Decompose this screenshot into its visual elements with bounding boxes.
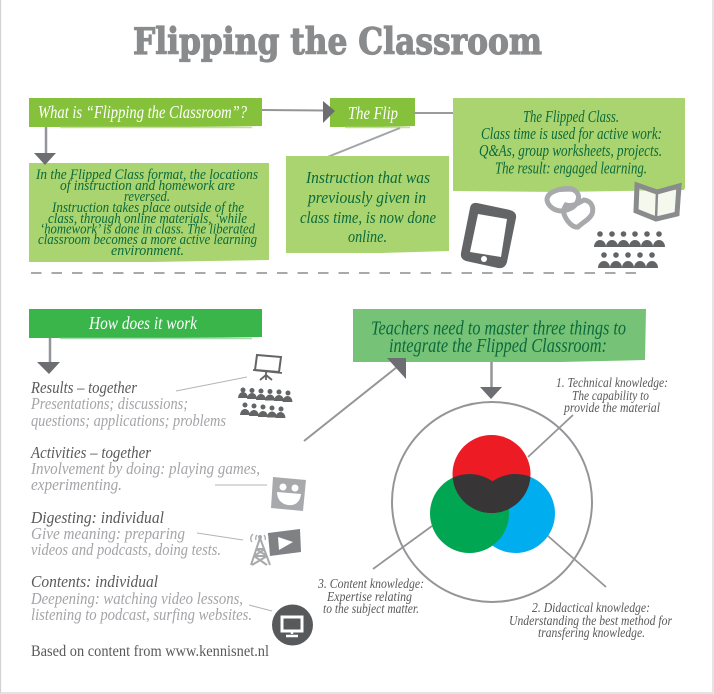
- label: technical knowledge: The capability to: [572, 388, 649, 403]
- icon: broadcast tower and video: [251, 529, 301, 565]
- panel: the flipped class: The result: engaged learning.: [495, 158, 647, 178]
- label: content knowledge: [317, 576, 424, 616]
- panel: the flipped class: [453, 98, 685, 192]
- arrow: diagonal to teachers panel: [304, 358, 406, 441]
- panel: definition text: environment.: [111, 243, 184, 259]
- text: activities: experimenting.: [31, 475, 122, 494]
- icon: audience: [594, 231, 665, 268]
- title: Flipping the Classroom: [133, 21, 542, 63]
- icon: monitor: [272, 604, 313, 646]
- text: results: [30, 378, 226, 430]
- icon: speech bubbles: [547, 188, 593, 227]
- divider: [31, 272, 643, 274]
- panel: the flip: The Flip: [348, 103, 398, 123]
- label: technical knowledge: [556, 375, 668, 415]
- panel: the flipped class: The Flipped Class.: [523, 107, 619, 126]
- connectors: venn to labels: [373, 415, 606, 587]
- panel: what is flipping the classroom: [29, 98, 262, 128]
- connector: the flip to flipped class: [413, 112, 455, 114]
- panel: definition text: ‘homework’ is done in class. The liberated: [40, 222, 256, 238]
- text: digesting: Digesting: individual: [30, 508, 164, 527]
- panel: the flip: [330, 98, 415, 128]
- panel: definition text: classroom becomes a more active learning: [38, 232, 257, 248]
- text: contents: Deepening: watching video lessons,: [30, 589, 243, 608]
- panel: definition text: reversed.: [124, 189, 170, 205]
- connector: the flip to instruction box: [325, 128, 400, 158]
- arrow: what is down to definition: [45, 127, 47, 156]
- label: didactical knowledge: [509, 600, 673, 640]
- arrowhead: definition: [34, 153, 56, 165]
- panel: the flipped class: Q&As, group worksheets, projects.: [479, 141, 662, 160]
- panel: definition text: of instruction and homework are: [60, 178, 236, 194]
- text: activities: Involvement by doing: playing games,: [30, 459, 260, 478]
- text: digesting: Give meaning: preparing: [31, 524, 185, 543]
- text: results: questions; applications; problems: [31, 411, 226, 430]
- panel: teachers need to master: Teachers need to master three things to: [371, 318, 626, 340]
- venn diagram: [392, 402, 592, 602]
- panel: instruction online: Instruction that was: [305, 168, 430, 187]
- text: contents: listening to podcast, surfing websites.: [31, 605, 252, 624]
- panel: the flipped class: Class time is used for active work:: [481, 124, 662, 143]
- label: content knowledge: to the subject matter.: [323, 601, 419, 616]
- text: results: Results – together: [30, 378, 138, 397]
- panel: instruction online: [286, 156, 449, 253]
- icon: open book: [636, 185, 679, 219]
- panel: instruction online: class time, is now done: [300, 208, 436, 227]
- arrow: teachers panel to diagram: [480, 362, 502, 399]
- source note: Based on content from www.kennisnet.nl: [31, 643, 269, 660]
- text: contents: [30, 572, 252, 624]
- text: activities: Activities – together: [30, 443, 152, 462]
- arrow: what is to the flip: [262, 101, 335, 123]
- text: contents: Contents: individual: [31, 572, 158, 591]
- panel: how does it work: [29, 309, 262, 338]
- label: didactical knowledge: transfering knowledge.: [538, 625, 645, 640]
- panel: teachers need to master: integrate the Flipped Classroom:: [389, 336, 607, 357]
- label: didactical knowledge: 2. Didactical knowledge:: [532, 600, 650, 615]
- panel: definition text: [29, 163, 269, 262]
- label: technical knowledge: provide the material: [563, 400, 660, 415]
- panel: instruction online: previously given in: [307, 188, 426, 207]
- label: content knowledge: 3. Content knowledge:: [317, 576, 424, 591]
- panel: how does it work: How does it work: [88, 313, 198, 333]
- arrow: how does it work: [37, 338, 60, 374]
- connectors: list items to icons: [176, 377, 272, 611]
- panel: teachers need to master: [353, 309, 646, 362]
- text: activities: [30, 443, 260, 494]
- label: technical knowledge: 1. Technical knowledge:: [556, 375, 668, 390]
- panel: instruction online: online.: [348, 227, 387, 246]
- panel: definition text: Instruction takes place outside of the: [51, 200, 244, 216]
- panel: definition text: class, through online materials, ‘while: [48, 211, 247, 227]
- panel: definition text: In the Flipped Class format, the locations: [35, 167, 258, 183]
- panel: what is flipping the classroom: What is “Flipping the Classroom”?: [38, 102, 247, 122]
- text: digesting: [30, 508, 221, 559]
- icon: tablet: [461, 203, 516, 268]
- text: digesting: videos and podcasts, doing tests.: [31, 540, 221, 559]
- icon: projector screen with audience: [238, 355, 292, 418]
- label: didactical knowledge: Understanding the best method for: [509, 613, 673, 628]
- label: content knowledge: Expertise relating: [326, 589, 412, 604]
- text: results: Presentations; discussions;: [30, 394, 188, 413]
- icon: smiley: [271, 477, 306, 511]
